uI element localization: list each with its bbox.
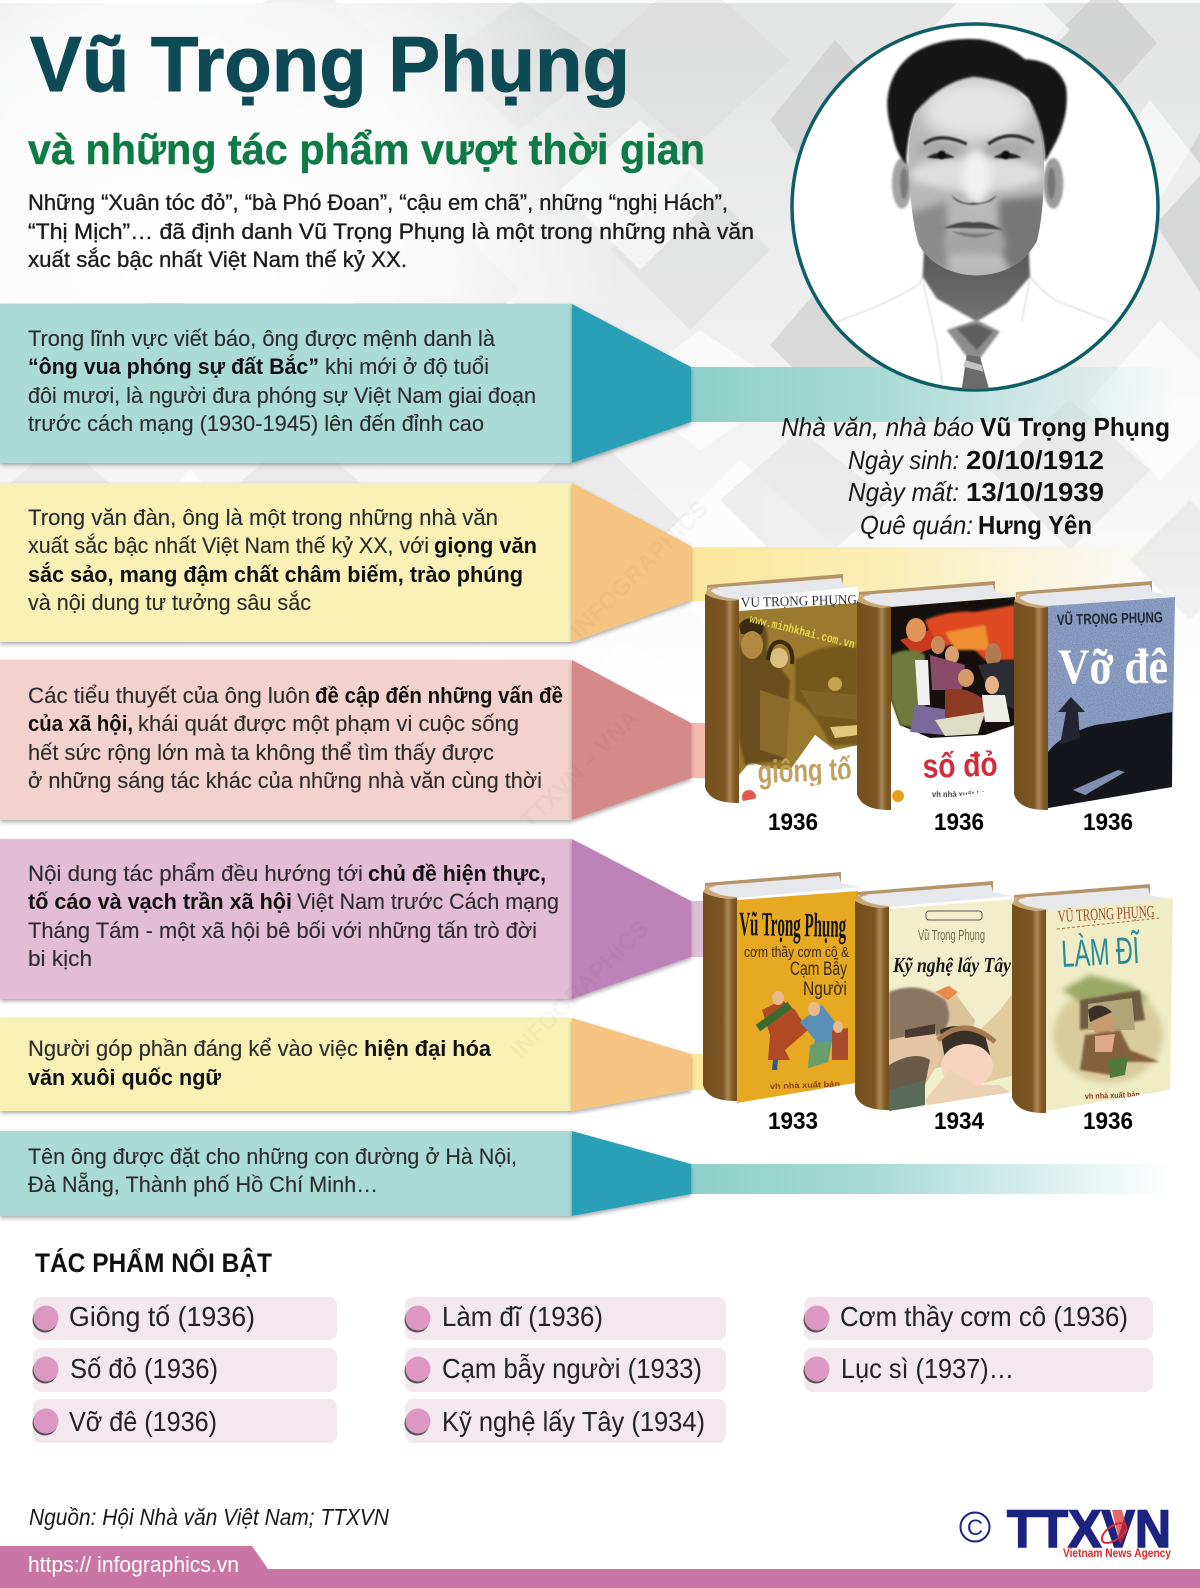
panel: ribbon 4 themes: Tháng Tám - một xã hội bê bối với những tấn trò đời: [28, 918, 537, 943]
panel: ribbon 4 themes: bi kịch: [28, 946, 92, 971]
book: Kỹ nghệ lấy Tây: Vũ Trọng Phụng: [918, 927, 985, 944]
book: Vỡ đê: VŨ TRỌNG PHỤNG: [1057, 608, 1163, 629]
list column 1: Giông tố (1936): [69, 1301, 255, 1332]
book: Kỹ nghệ lấy Tây: [855, 881, 1015, 1115]
list column 2: [404, 1297, 726, 1443]
panel: ribbon 3 novels: của xã hội,: [28, 711, 133, 736]
panel: ribbon 4 themes: [0, 839, 691, 999]
book: Cơm thầy cơm cô, Cạm bẫy người: Cạm Bẫy: [790, 958, 847, 980]
book: Vỡ đê: [1014, 581, 1176, 810]
panel: ribbon 1 journalism: đôi mươi, là người đưa phóng sự Việt Nam giai đoạn: [28, 383, 536, 408]
info block under portrait: Nhà văn, nhà báo: [781, 412, 974, 442]
eyes: [927, 151, 1022, 159]
book: Giông tố: [705, 574, 863, 810]
book: Cơm thầy cơm cô, Cạm bẫy người: Vũ Trọng Phụng: [739, 906, 846, 945]
book year: 1936: [1083, 809, 1133, 836]
book year: 1933: [768, 1108, 818, 1135]
neck: [923, 247, 1030, 322]
panel: ribbon 5 prose: hiện đại hóa: [364, 1036, 492, 1061]
list column 1: Số đỏ (1936): [70, 1353, 218, 1384]
list column 3: Lục sì (1937)…: [841, 1353, 1014, 1384]
panel: ribbon 6 streets: [0, 1131, 691, 1216]
tie: [947, 320, 1000, 358]
panel: ribbon 3 novels: Các tiểu thuyết của ông luôn: [28, 683, 310, 708]
shirt: [837, 275, 1113, 390]
subtitle: và những tác phẩm vượt thời gian: [28, 126, 705, 174]
panel: ribbon 2 literature: xuất sắc bậc nhất Việt Nam thế kỷ XX, với: [28, 533, 429, 558]
info block under portrait: [781, 412, 1170, 540]
info block under portrait: Vũ Trọng Phụng: [980, 412, 1170, 442]
watermarks: TTXVN – VNA: [515, 705, 645, 834]
footer bar: [0, 1546, 1200, 1588]
panel: ribbon 4 themes: Nội dung tác phẩm đều hướng tới: [28, 861, 363, 886]
panel: ribbon 1 journalism: [0, 304, 691, 463]
panel: ribbon 2 literature: sắc sảo, mang đậm chất châm biếm, trào phúng: [28, 562, 523, 587]
ears: [892, 158, 1063, 209]
panel: ribbon 4 themes: tố cáo và vạch trần xã hội: [28, 889, 292, 914]
panel: ribbon 2 literature: Trong văn đàn, ông là một trong những nhà văn: [28, 505, 498, 530]
panel: ribbon 3 novels: đề cập đến những vấn đề: [315, 683, 563, 708]
book year: 1936: [1083, 1108, 1133, 1135]
book: Số đỏ: [857, 581, 1016, 810]
book: Làm đĩ: vh nhà xuất bản: [1085, 1090, 1140, 1101]
intro paragraph: [28, 190, 754, 272]
connector bands: [690, 367, 1200, 1194]
list column 1: [32, 1297, 337, 1443]
book: Làm đĩ: [1012, 884, 1176, 1115]
book: Kỹ nghệ lấy Tây: Kỹ nghệ lấy Tây: [892, 953, 1012, 977]
panel: ribbon 3 novels: ở những sáng tác khác của những nhà văn cùng thời: [28, 768, 542, 793]
list column 2: Làm đĩ (1936): [442, 1301, 603, 1332]
watermarks: INFOGRAPHICS: [505, 915, 654, 1064]
info block under portrait: Ngày mất:: [848, 477, 959, 507]
intro paragraph: xuất sắc bậc nhất Việt Nam thế kỷ XX.: [28, 247, 407, 272]
info block under portrait: Hưng Yên: [978, 510, 1092, 540]
logo: TTXVN: Vietnam News Agency: [1063, 1546, 1171, 1560]
hair: [887, 39, 1067, 164]
panel: ribbon 2 literature: giọng văn: [434, 533, 537, 558]
watermarks: [505, 495, 714, 1064]
intro paragraph: “Thị Mịch”… đã định danh Vũ Trọng Phụng là một trong những nhà văn: [28, 219, 754, 244]
title: Vũ Trọng Phụng: [30, 20, 630, 108]
list column 2: Kỹ nghệ lấy Tây (1934): [442, 1406, 705, 1437]
source note: Nguồn: Hội Nhà văn Việt Nam; TTXVN: [29, 1504, 389, 1530]
nose and mouth: [943, 195, 1003, 238]
background: grey diamond pattern: [0, 0, 1200, 620]
book year: 1936: [768, 809, 818, 836]
panel: ribbon 1 journalism: khi mới ở độ tuổi: [325, 354, 489, 379]
book: Vỡ đê: Vỡ đê: [1058, 638, 1168, 694]
book: Làm đĩ: LÀM ĐĨ: [1060, 929, 1141, 976]
panel: ribbon 2 literature: [0, 483, 691, 642]
logo: TTXVN: TTXVN: [1007, 1500, 1171, 1559]
portrait: [792, 24, 1158, 390]
info block under portrait: Ngày sinh:: [848, 445, 959, 475]
logo: TTXVN: C: [967, 1515, 983, 1540]
panel: ribbon 1 journalism: Trong lĩnh vực viết báo, ông được mệnh danh là: [28, 326, 496, 351]
book year: 1934: [934, 1108, 985, 1135]
intro paragraph: Những “Xuân tóc đỏ”, “bà Phó Đoan”, “cậu em chã”, những “nghị Hách”,: [28, 190, 728, 215]
panel: ribbon 4 themes: chủ đề hiện thực,: [368, 861, 546, 886]
panel: ribbon 5 prose: văn xuôi quốc ngữ: [28, 1065, 221, 1090]
list column 3: [804, 1297, 1153, 1392]
book: Cơm thầy cơm cô, Cạm bẫy người: [703, 872, 861, 1108]
info block under portrait: 13/10/1939: [966, 477, 1104, 507]
book: Giông tố: giông tố: [757, 751, 852, 790]
list column 1: Vỡ đê (1936): [69, 1406, 217, 1437]
heading: notable works: TÁC PHẨM NỔI BẬT: [35, 1247, 272, 1278]
brows: [924, 136, 1034, 144]
book: Cơm thầy cơm cô, Cạm bẫy người: cơm thầy cơm cô &: [744, 944, 849, 961]
list column 2: Cạm bẫy người (1933): [442, 1353, 702, 1384]
panel: ribbon 6 streets: Tên ông được đặt cho những con đường ở Hà Nội,: [28, 1144, 517, 1169]
panel: ribbon 3 novels: khái quát được một phạm vi cuộc sống: [138, 711, 519, 736]
panel: ribbon 4 themes: Việt Nam trước Cách mạng: [297, 889, 559, 914]
panel: ribbon 1 journalism: “ông vua phóng sự đất Bắc”: [28, 354, 319, 379]
watermarks: INFOGRAPHICS: [565, 495, 714, 644]
info block under portrait: Quê quán:: [860, 510, 973, 540]
book year: 1936: [934, 809, 984, 836]
footer bar: https:// infographics.vn: [28, 1552, 239, 1577]
panel: ribbon 3 novels: hết sức rộng lớn mà ta không thể tìm thấy được: [28, 740, 494, 765]
book: Giông tố: VŨ TRỌNG PHỤNG: [741, 591, 857, 611]
book: Giông tố: www.minhkhai.com.vn: [748, 612, 856, 652]
panel: ribbon 2 literature: và nội dung tư tưởng sâu sắc: [28, 590, 311, 615]
book: Cơm thầy cơm cô, Cạm bẫy người: vh nhà xuất bản: [770, 1080, 840, 1091]
book: Số đỏ: số đỏ: [922, 745, 998, 786]
panel: ribbon 1 journalism: trước cách mạng (1930-1945) lên đến đỉnh cao: [28, 411, 484, 436]
book: Cơm thầy cơm cô, Cạm bẫy người: Người: [803, 979, 847, 1000]
list column 3: Cơm thầy cơm cô (1936): [840, 1301, 1128, 1332]
info block under portrait: 20/10/1912: [966, 445, 1104, 475]
panel: ribbon 6 streets: Đà Nẵng, Thành phố Hồ Chí Minh…: [28, 1172, 378, 1197]
face: [908, 76, 1044, 276]
panel: ribbon 3 novels: [0, 660, 691, 820]
panel: ribbon 5 prose: [0, 1018, 691, 1111]
panel: ribbon 5 prose: Người góp phần đáng kể vào việc: [28, 1036, 358, 1061]
book: Số đỏ: vh nhà xuất bản: [932, 790, 990, 799]
